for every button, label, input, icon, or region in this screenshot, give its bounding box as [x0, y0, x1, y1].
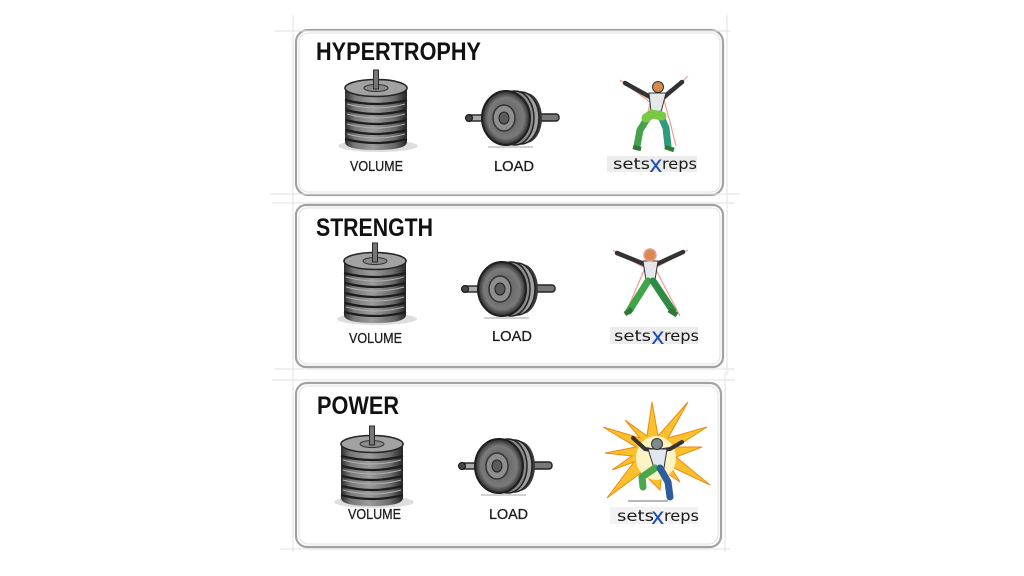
heading: hypertrophy: HYPERTROPHY [316, 38, 481, 66]
label: load: LOAD [492, 328, 532, 345]
icon: athlete with energy burst [603, 402, 710, 501]
label: volume: VOLUME [349, 330, 402, 347]
panel frame: hypertrophy [270, 15, 740, 200]
heading: strength: STRENGTH [316, 214, 433, 242]
icon: athlete star pose [613, 249, 688, 316]
icon: load wheel [466, 91, 559, 147]
icon: load wheel [462, 262, 555, 318]
icon: volume plate stack [338, 70, 418, 152]
heading: power: POWER [317, 392, 399, 420]
label: sets x reps [610, 324, 699, 350]
label: volume: VOLUME [348, 506, 401, 523]
label: sets x reps: x [649, 152, 663, 178]
label: load: LOAD [489, 506, 528, 523]
label: sets x reps [610, 504, 699, 530]
panel: power [272, 372, 735, 552]
label: sets x reps: reps [664, 327, 699, 345]
label: sets x reps: x [651, 324, 665, 350]
label: sets x reps: reps [664, 507, 699, 525]
label: volume: VOLUME [350, 158, 403, 175]
icon: volume plate stack [334, 426, 414, 508]
label: sets x reps: x [651, 504, 665, 530]
label: sets x reps [607, 152, 697, 178]
label: sets x reps: reps [662, 155, 697, 173]
panel: hypertrophy [270, 15, 740, 200]
label: sets x reps: sets [617, 507, 654, 525]
label: sets x reps: sets [614, 327, 651, 345]
panel frame: strength [272, 195, 735, 375]
icon: volume plate stack [337, 243, 417, 325]
label: sets x reps: sets [613, 155, 650, 173]
icon: athlete star pose [620, 76, 688, 150]
label: load: LOAD [494, 158, 534, 175]
panel: strength [272, 195, 735, 375]
panel frame: power [272, 372, 735, 552]
icon: load wheel [458, 439, 552, 495]
